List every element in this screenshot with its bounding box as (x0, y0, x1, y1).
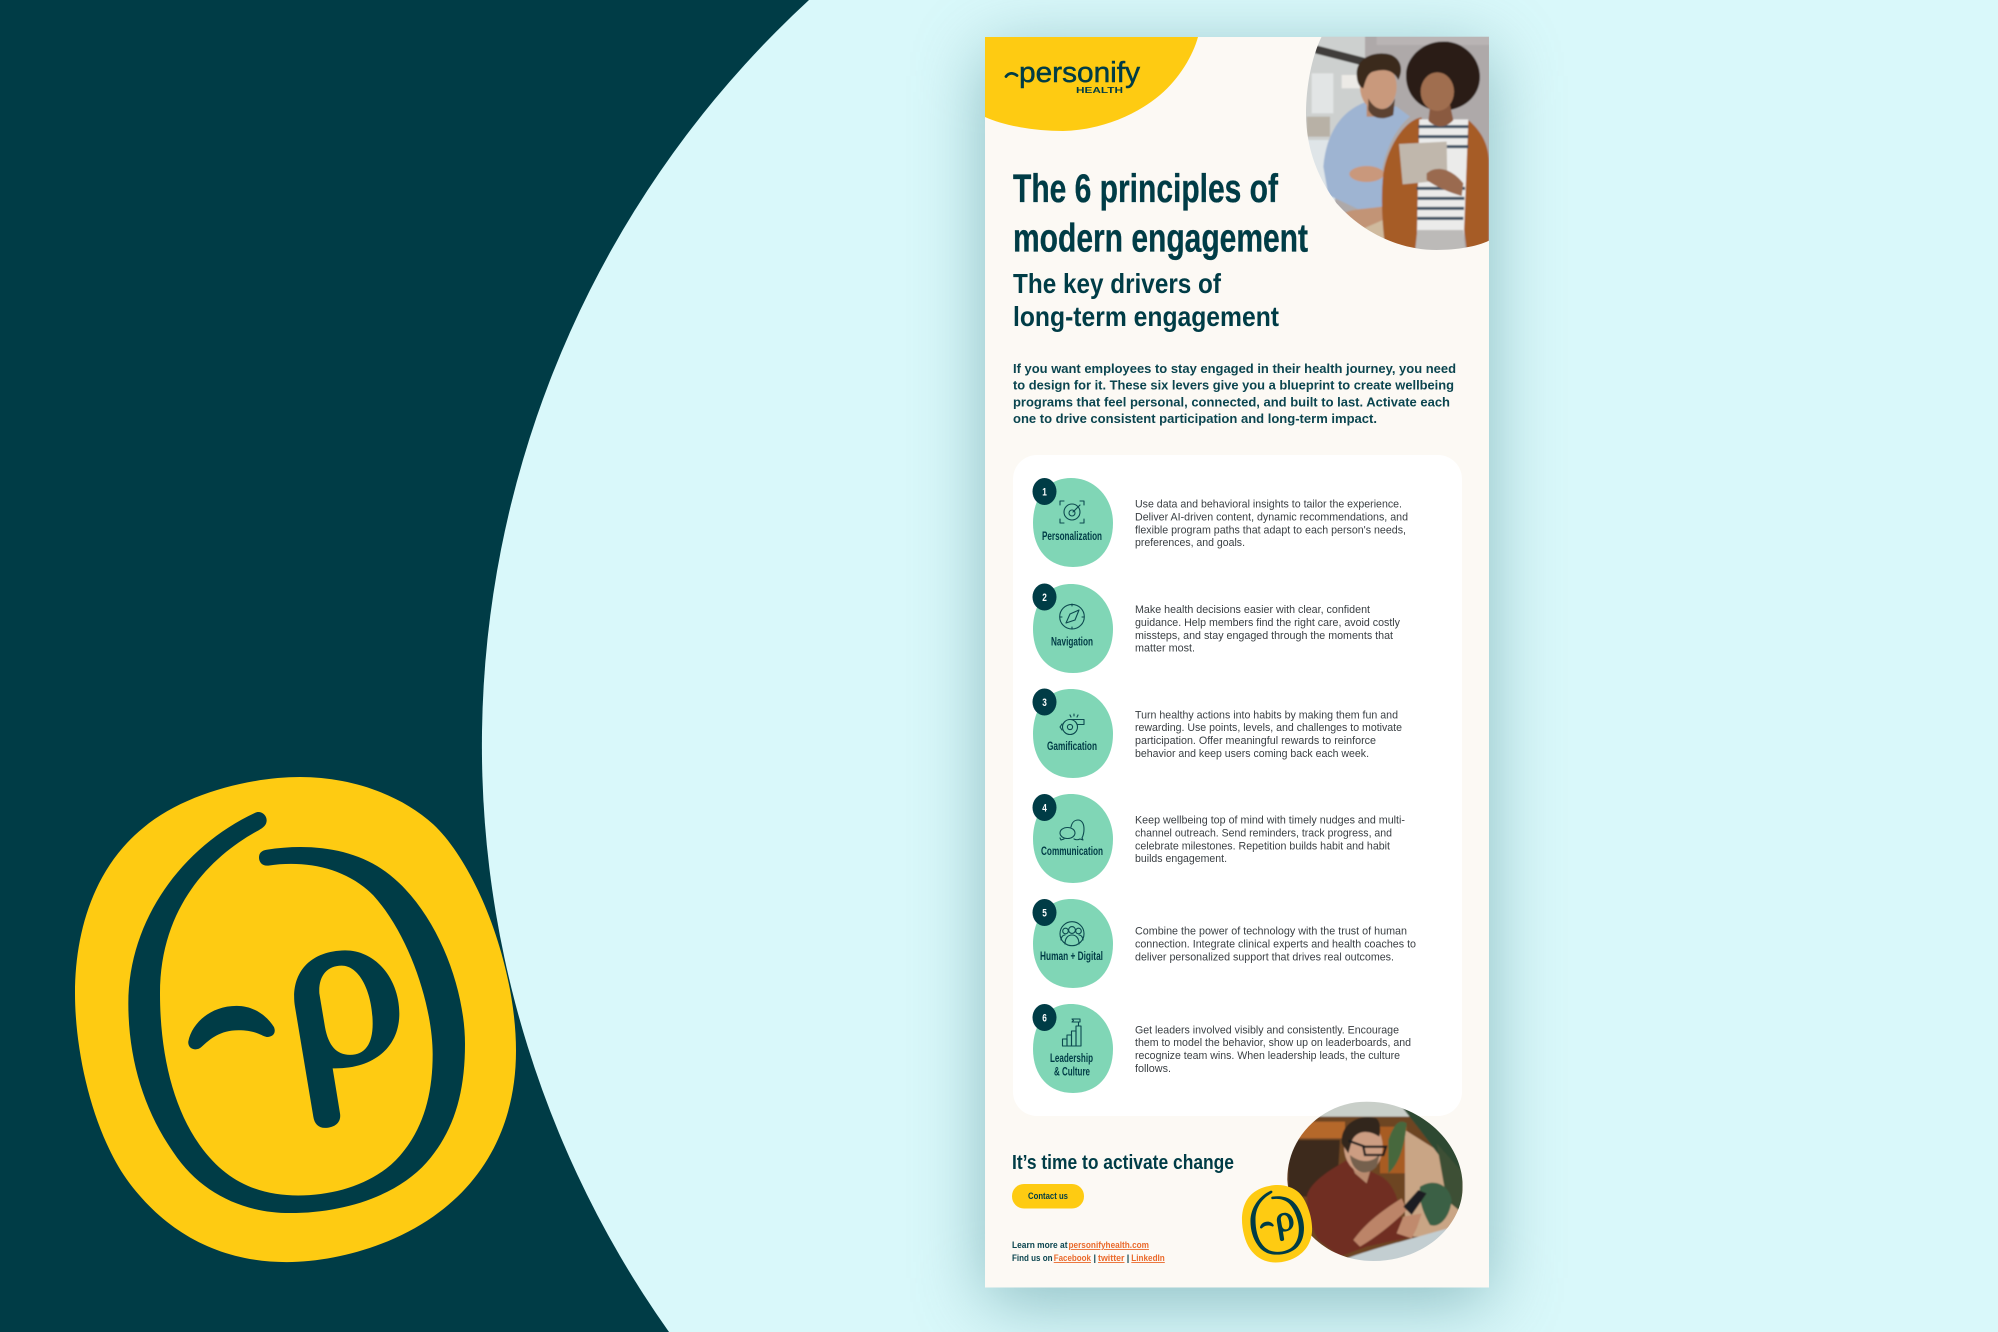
intro paragraph (1013, 361, 1456, 426)
principle 2: navigation: matter most. (1135, 643, 1195, 655)
principle 3: gamification: Turn healthy actions into habits by making them fun and (1135, 709, 1398, 721)
intro paragraph: programs that feel personal, connected, and built to last. Activate each (1013, 394, 1450, 410)
principle 5: human + digital: deliver personalized support that drives real outcomes. (1135, 951, 1394, 963)
principle 6: leadership and culture: recognize team wins. When leadership leads, the culture (1135, 1050, 1400, 1062)
footer links: personifyhealth.com (1068, 1240, 1149, 1250)
footer links: | (1094, 1253, 1096, 1263)
principle 3: gamification: Gamification (1047, 741, 1097, 753)
principle 6: leadership and culture (1032, 1004, 1411, 1093)
panel: six principles (1013, 455, 1462, 1116)
principle 2: navigation: Make health decisions easier with clear, confident (1135, 604, 1370, 616)
principle 4: communication: celebrate milestones. Repetition builds habit and habit (1135, 840, 1390, 852)
intro paragraph: one to drive consistent participation and long-term impact. (1013, 411, 1377, 426)
footer links (1012, 1240, 1165, 1263)
principle 1: personalization: Use data and behavioral insights to tailor the experience. (1135, 499, 1402, 511)
principle 6: leadership and culture: 6 (1042, 1012, 1047, 1024)
title (1013, 167, 1308, 260)
photo: man using phone (1285, 1100, 1465, 1263)
principle 2: navigation: Navigation (1051, 636, 1093, 648)
subtitle: The key drivers of (1013, 268, 1222, 299)
footer links: Facebook (1054, 1253, 1092, 1263)
large Personify logo mark (75, 777, 516, 1262)
photo: colleagues with tablet (1303, 35, 1490, 252)
principle 2: navigation: guidance. Help members find the right care, avoid costly (1135, 617, 1401, 629)
principle 5: human + digital: 5 (1042, 908, 1047, 920)
principle 6: leadership and culture: & Culture (1054, 1066, 1090, 1078)
subtitle (1013, 268, 1279, 332)
footer links: twitter (1098, 1253, 1125, 1263)
principle 1: personalization (1032, 478, 1408, 567)
principle 2: navigation (1032, 584, 1401, 673)
principle 1: personalization: 1 (1042, 486, 1047, 498)
principle 1: personalization: Personalization (1042, 531, 1102, 543)
principle 1: personalization: preferences, and goals. (1135, 537, 1245, 549)
principle 6: leadership and culture: Leadership (1050, 1053, 1093, 1065)
principle 3: gamification: behavior and keep users coming back each week. (1135, 748, 1369, 760)
call to action heading: It’s time to activate change (1012, 1152, 1234, 1174)
title: modern engagement (1013, 216, 1308, 260)
principle 5: human + digital: Combine the power of technology with the trust of human (1135, 926, 1407, 938)
principle 5: human + digital: connection. Integrate clinical experts and health coaches to (1135, 938, 1416, 950)
card drop shadow (985, 52, 1489, 1302)
principle 6: leadership and culture: follows. (1135, 1063, 1171, 1075)
intro paragraph: to design for it. These six levers give you a blueprint to create wellbeing (1013, 378, 1454, 393)
principle 4: communication: Keep wellbeing top of mind with timely nudges and multi- (1135, 815, 1405, 827)
footer links: LinkedIn (1131, 1253, 1165, 1263)
footer links: Learn more at (1012, 1240, 1068, 1250)
subtitle: long-term engagement (1013, 301, 1279, 332)
principle 6: leadership and culture: Get leaders involved visibly and consistently. Encourage (1135, 1024, 1399, 1036)
header logo block: HEALTH (1076, 85, 1123, 95)
principle 1: personalization: Deliver AI-driven content, dynamic recommendations, and (1135, 512, 1408, 524)
principle 6: leadership and culture: them to model the behavior, show up on leaderboards, and (1135, 1037, 1411, 1049)
principle 4: communication: channel outreach. Send reminders, track progress, and (1135, 828, 1392, 840)
principle 4: communication: builds engagement. (1135, 853, 1227, 865)
contact button (1012, 1184, 1084, 1208)
principle 3: gamification: 3 (1042, 697, 1047, 709)
principle 3: gamification: participation. Offer meaningful rewards to reinforce (1135, 735, 1376, 747)
principle 4: communication: 4 (1042, 802, 1047, 814)
contact button: Contact us (1028, 1191, 1068, 1201)
principle 2: navigation: missteps, and stay engaged through the moments that (1135, 630, 1393, 642)
principle 3: gamification: rewarding. Use points, levels, and challenges to motivate (1135, 722, 1402, 734)
background: light aqua arc (482, 0, 1998, 1332)
title: The 6 principles of (1013, 167, 1279, 211)
principle 2: navigation: 2 (1042, 592, 1047, 604)
intro paragraph: If you want employees to stay engaged in their health journey, you need (1013, 361, 1456, 376)
footer links: | (1127, 1253, 1129, 1263)
principle 1: personalization: flexible program paths that adapt to each person's needs, (1135, 524, 1406, 536)
small logo mark (1242, 1185, 1312, 1263)
footer links: Find us on (1012, 1253, 1052, 1263)
header logo block: personify (1019, 57, 1141, 89)
principle 4: communication (1032, 794, 1405, 883)
principle 5: human + digital (1032, 899, 1416, 988)
principle 3: gamification (1032, 688, 1402, 778)
infographic card (985, 35, 1490, 1287)
principle 4: communication: Communication (1041, 846, 1103, 858)
principle 5: human + digital: Human + Digital (1040, 951, 1103, 963)
header logo block (985, 37, 1198, 131)
